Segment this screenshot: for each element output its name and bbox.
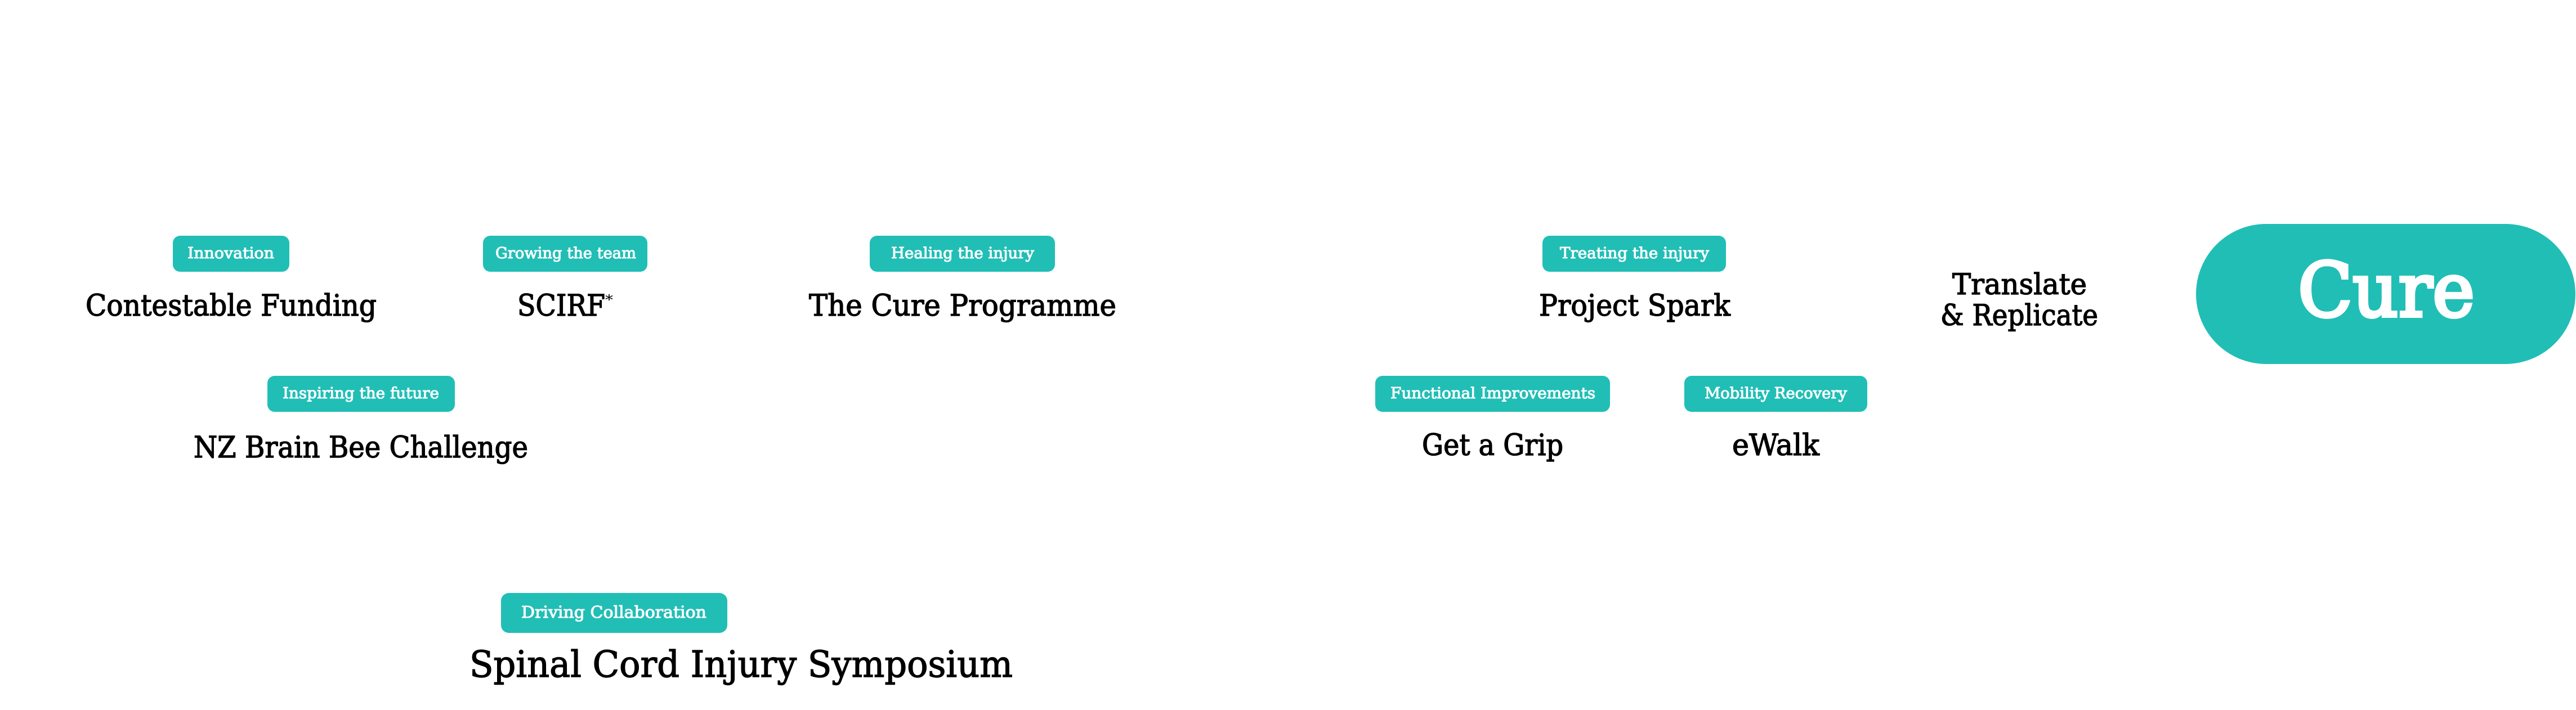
goal pill: Cure	[2196, 224, 2575, 364]
label: SCIRF with asterisk: *	[605, 292, 613, 308]
label: Spinal Cord Injury Symposium: Spinal Cord Injury Symposium	[469, 644, 1013, 686]
text: Translate & Replicate	[1940, 268, 2098, 332]
text: Translate & Replicate: Translate	[1952, 268, 2087, 302]
text: Translate & Replicate: & Replicate	[1940, 299, 2098, 332]
badge: Innovation: Innovation	[187, 245, 274, 262]
badge: Growing the team: Growing the team	[495, 245, 636, 262]
goal pill: Cure: Cure	[2298, 248, 2475, 334]
badge: Driving Collaboration: Driving Collaboration	[521, 603, 706, 622]
label: Get a Grip: Get a Grip	[1422, 429, 1563, 462]
badge: Functional Improvements: Functional Improvements	[1390, 385, 1595, 402]
item: Contestable Funding	[86, 236, 377, 323]
label: NZ Brain Bee Challenge: NZ Brain Bee Challenge	[194, 431, 528, 465]
item: The Cure Programme	[809, 236, 1116, 323]
badge: Growing the team	[483, 236, 647, 272]
label: The Cure Programme: The Cure Programme	[809, 289, 1116, 323]
label: Project Spark: Project Spark	[1539, 289, 1730, 323]
badge: Inspiring the future: Inspiring the future	[283, 385, 439, 402]
badge: Functional Improvements	[1375, 376, 1610, 412]
badge: Inspiring the future	[267, 376, 455, 412]
badge: Treating the injury	[1542, 236, 1726, 272]
item: Project Spark	[1539, 236, 1730, 323]
badge: Healing the injury	[870, 236, 1055, 272]
item: NZ Brain Bee Challenge	[194, 376, 528, 465]
label: SCIRF with asterisk: SCIRF	[517, 289, 605, 323]
item: Get a Grip	[1375, 376, 1610, 462]
item: Spinal Cord Injury Symposium	[469, 593, 1013, 686]
item: eWalk	[1684, 376, 1867, 462]
badge: Mobility Recovery: Mobility Recovery	[1705, 385, 1848, 402]
badge: Driving Collaboration	[501, 593, 727, 633]
item: SCIRF	[483, 236, 647, 323]
label: eWalk: eWalk	[1732, 429, 1819, 462]
label: Contestable Funding: Contestable Funding	[86, 289, 377, 323]
badge: Treating the injury: Treating the injury	[1560, 245, 1710, 262]
badge: Healing the injury: Healing the injury	[891, 245, 1035, 262]
badge: Mobility Recovery	[1684, 376, 1867, 412]
badge: Innovation	[173, 236, 289, 272]
